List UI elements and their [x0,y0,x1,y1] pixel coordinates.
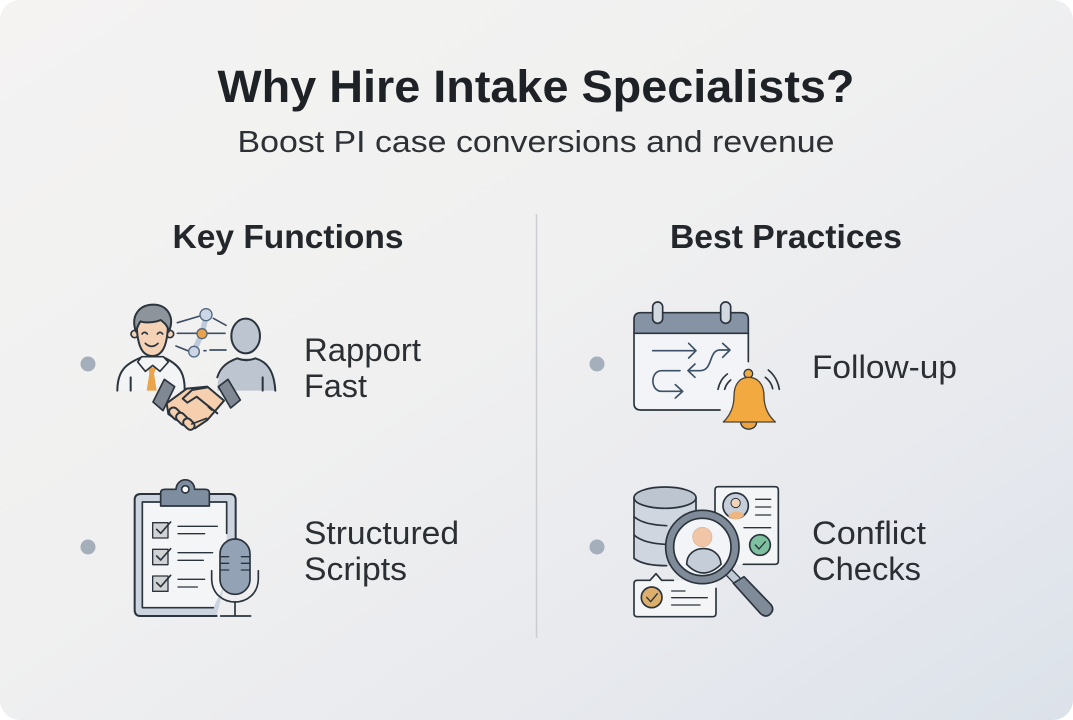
label: follow-up: Follow-up [812,349,957,385]
label: rapport fast: Rapport [304,332,421,368]
heading: key functions: Key Functions [172,218,404,255]
fingers [167,406,196,432]
label: structured scripts: Scripts [304,551,407,587]
label: rapport fast [304,332,421,404]
magnifier lens [666,510,739,584]
icon: clipboard and microphone [135,480,258,616]
bullet: follow-up [590,356,604,372]
label: conflict checks: Conflict [812,515,926,551]
agent shirt [117,357,185,391]
bullet: rapport fast [80,356,96,372]
checklist [153,522,217,591]
bullet: structured scripts [80,540,96,554]
icon: handshake with agent and client [117,305,275,432]
magnifier handle [728,572,737,581]
bell [741,422,757,429]
label: rapport fast: Fast [304,368,367,404]
label: conflict checks: Checks [812,551,921,587]
icon: calendar and bell [634,302,779,429]
label: structured scripts [304,515,459,587]
database [634,498,696,566]
agent head [131,330,138,338]
icon: database search [634,487,778,617]
label: structured scripts: Structured [304,515,459,551]
hands [167,387,224,428]
subtitle: Boost PI case conversions and revenue [238,124,834,159]
heading: best practices: Best Practices [670,218,902,255]
microphone [220,539,250,594]
profile card [715,487,778,564]
cuffs [153,379,175,411]
note card [634,580,716,617]
title: Why Hire Intake Specialists? [218,61,854,112]
client silhouette [217,358,275,391]
network lines [176,316,226,351]
label: conflict checks [812,515,926,587]
bullet: conflict checks [590,540,604,554]
